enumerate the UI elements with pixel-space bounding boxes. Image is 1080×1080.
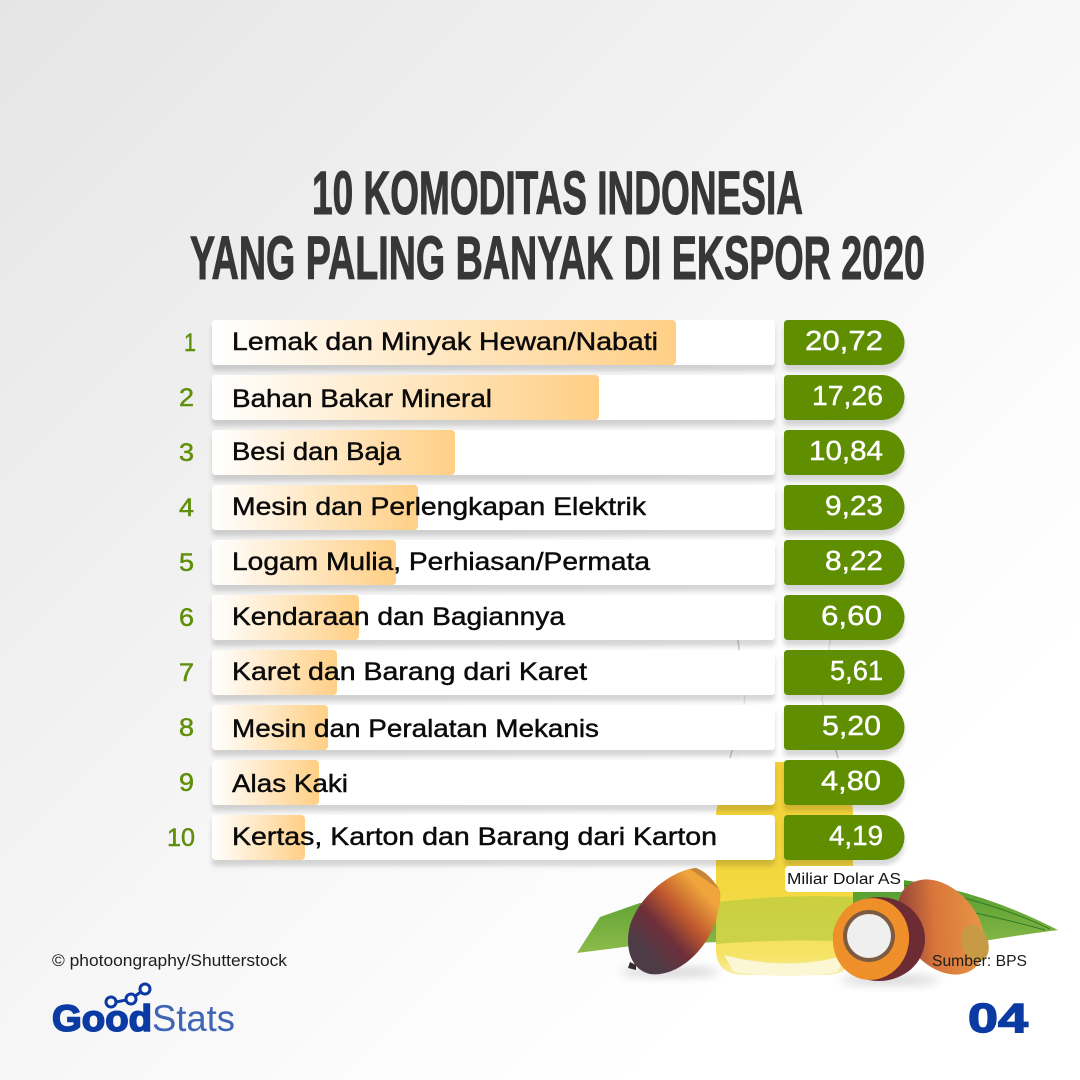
- row 4: 9,23: [825, 490, 883, 521]
- row 6: 6,60: [821, 600, 882, 631]
- bottle glass outline: [730, 640, 838, 758]
- row 7: 5,61: [830, 655, 883, 686]
- row 8: Mesin dan Peralatan Mekanis: [232, 715, 599, 743]
- row 2: Bahan Bakar Mineral: [232, 385, 492, 413]
- row 9: 9: [179, 769, 194, 797]
- unit label: Miliar Dolar AS: [787, 871, 901, 888]
- shadows under fruits: [620, 968, 720, 976]
- row 3: Besi dan Baja: [232, 438, 401, 466]
- source: Sumber: BPS: [932, 953, 1027, 970]
- logo: GoodStats: Good: [52, 998, 152, 1039]
- row 7: 7: [179, 659, 194, 687]
- logo: GoodStats: [52, 984, 235, 1039]
- row 7: Karet dan Barang dari Karet: [232, 658, 587, 686]
- row 10: 4,19: [829, 820, 883, 851]
- photo credit: © photoongraphy/Shutterstock: [52, 952, 288, 970]
- row 8: 8: [179, 714, 194, 742]
- row 8: 5,20: [822, 710, 881, 741]
- row 7: [179, 650, 904, 695]
- row 3: [179, 430, 904, 475]
- row 9: 4,80: [821, 765, 881, 796]
- row 6: Kendaraan dan Bagiannya: [232, 603, 565, 631]
- row 5: 5: [179, 549, 194, 577]
- row 1: 20,72: [805, 325, 883, 356]
- row 5: 8,22: [825, 545, 883, 576]
- row 2: 17,26: [812, 380, 883, 411]
- row 8: [179, 705, 904, 750]
- oil: [716, 762, 853, 975]
- row 10: 10: [167, 824, 195, 852]
- row 1: [184, 320, 904, 365]
- row 4: 4: [179, 494, 194, 522]
- row 3: 3: [179, 439, 194, 467]
- row 1: Lemak dan Minyak Hewan/Nabati: [232, 328, 658, 356]
- row 6: 6: [179, 604, 194, 632]
- page number: 04: [968, 995, 1028, 1041]
- row 9: Alas Kaki: [232, 770, 348, 798]
- cut palm fruit: [826, 892, 925, 986]
- row 10: [167, 815, 904, 860]
- unit label: [785, 866, 904, 892]
- row 3: 10,84: [809, 435, 883, 466]
- row 2: [179, 375, 904, 420]
- ranking chart: [167, 320, 904, 860]
- logo: GoodStats: Stats: [152, 998, 235, 1039]
- row 4: [179, 485, 904, 530]
- row 5: Logam Mulia, Perhiasan/Permata: [232, 548, 650, 576]
- left palm fruit: [628, 868, 720, 974]
- title: [190, 159, 925, 292]
- back right palm fruit: [879, 862, 1003, 992]
- row 2: 2: [179, 384, 194, 412]
- logo chart line icon: [106, 984, 150, 1007]
- row 5: [179, 540, 904, 585]
- row 4: Mesin dan Perlengkapan Elektrik: [232, 493, 647, 521]
- row 6: [179, 595, 904, 640]
- illustration: oil bottle with palm fruits and leaf: [577, 640, 1058, 992]
- leaf: [577, 880, 1058, 953]
- row 1: 1: [184, 329, 196, 357]
- row 10: Kertas, Karton dan Barang dari Karton: [232, 823, 717, 851]
- row 9: [179, 760, 904, 805]
